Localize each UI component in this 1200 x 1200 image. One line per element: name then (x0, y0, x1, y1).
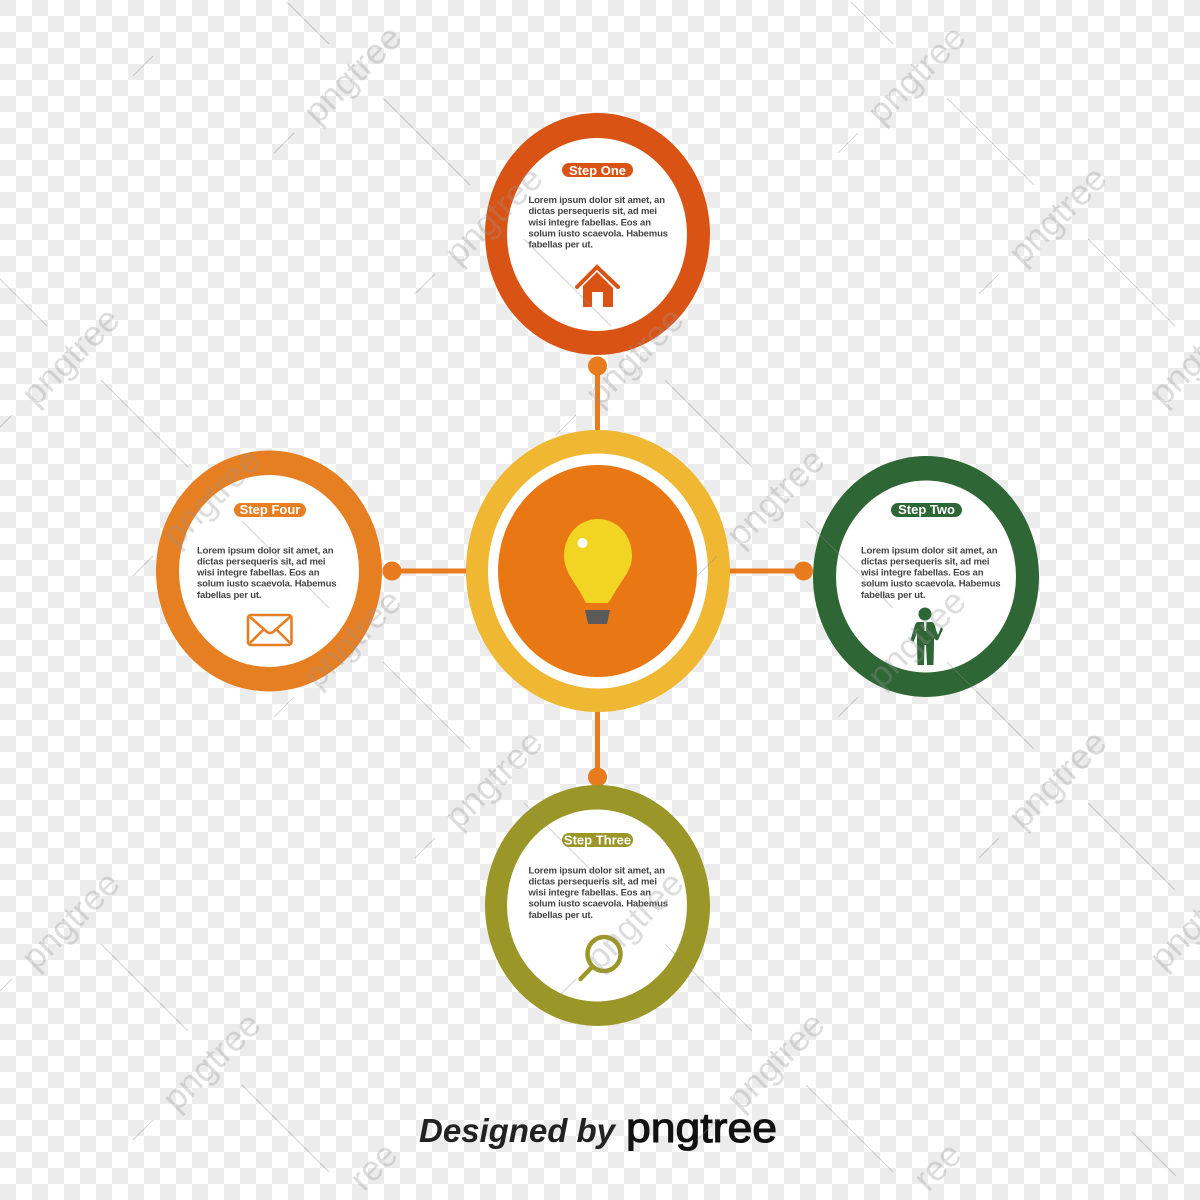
connector: bottom (588, 710, 607, 786)
icon: envelope (248, 615, 292, 645)
heading: step two: Step Two (898, 502, 955, 517)
text block: step one: fabellas per ut. (528, 240, 593, 250)
panel: step three (485, 785, 710, 1026)
watermarks: pngtree (1001, 159, 1115, 273)
watermarks: pngtree (155, 441, 269, 555)
footer credit (419, 1104, 777, 1151)
text block: step three (528, 865, 668, 921)
watermarks: pngtree (860, 18, 974, 132)
text block: step three: wisi integre fabellas. Eos an (528, 888, 651, 899)
watermarks: pngtree (719, 1005, 833, 1119)
text block: step two: fabellas per ut. (861, 590, 926, 601)
text block: step one: wisi integre fabellas. Eos an (528, 217, 651, 228)
watermarks: ree (342, 1135, 405, 1198)
icon: light bulb (564, 519, 632, 624)
watermarks: pngtree (14, 300, 128, 414)
text block: step three: fabellas per ut. (528, 910, 593, 921)
text block: step one: dictas persequeris sit, ad mei (528, 206, 657, 217)
watermarks: pngtree (437, 159, 551, 273)
watermarks: pngtree (578, 300, 692, 414)
text block: step two: dictas persequeris sit, ad mei (861, 556, 990, 567)
text block: step two: solum iusto scaevola. Habemus (861, 579, 1000, 590)
connector: left (382, 562, 468, 580)
text block: step one (528, 195, 668, 250)
text block: step four: solum iusto scaevola. Habemus (197, 579, 336, 590)
text block: step three: dictas persequeris sit, ad mei (528, 876, 657, 887)
heading: step one: Step One (569, 163, 626, 178)
watermarks: pngtree (860, 582, 974, 696)
text block: step one: solum iusto scaevola. Habemus (528, 228, 668, 239)
text block: step two: wisi integre fabellas. Eos an (860, 568, 984, 579)
icon: person (910, 608, 943, 665)
panel: step four (156, 450, 382, 692)
text block: step four: Lorem ipsum dolor sit amet, an (197, 545, 334, 556)
text block: step four: fabellas per ut. (197, 590, 262, 601)
watermarks: pngtree (437, 723, 551, 837)
watermarks: pngtree (578, 864, 692, 978)
connector: right (728, 562, 813, 580)
watermarks: pngtree (1001, 723, 1115, 837)
connector: top (588, 356, 607, 432)
watermarks: pngtree (296, 18, 410, 132)
text block: step three: solum iusto scaevola. Habemus (528, 899, 668, 910)
panel: step one (485, 113, 710, 355)
text block: step four: wisi integre fabellas. Eos an (196, 568, 320, 579)
text block: step one: Lorem ipsum dolor sit amet, an (528, 195, 665, 206)
text block: step four (196, 545, 336, 601)
icon: house (577, 267, 618, 307)
watermarks: pngtree (719, 441, 833, 555)
watermarks: pngtree (155, 1005, 269, 1119)
icon: magnifier (580, 937, 620, 979)
watermarks: ree (906, 1135, 969, 1198)
text block: step four: dictas persequeris sit, ad mei (197, 556, 326, 567)
text block: step two: Lorem ipsum dolor sit amet, an (861, 545, 998, 556)
footer credit: pngtree (626, 1104, 777, 1151)
heading: step four: Step Four (240, 502, 300, 517)
text block: step three: Lorem ipsum dolor sit amet, an (528, 865, 665, 876)
text block: step two (860, 545, 1000, 601)
panel: step two (813, 456, 1039, 697)
heading: step three: Step Three (564, 832, 631, 848)
watermarks: pngtree (296, 582, 410, 696)
panel: central idea hub (466, 430, 730, 712)
footer credit: Designed by (419, 1112, 617, 1149)
watermarks: pngtree (14, 864, 128, 978)
